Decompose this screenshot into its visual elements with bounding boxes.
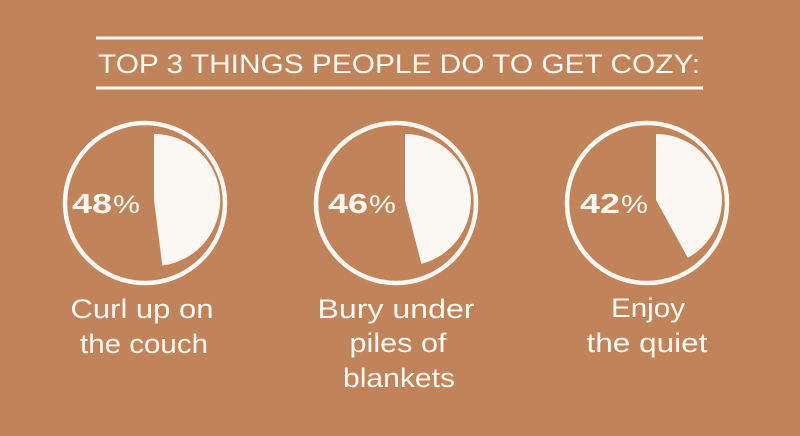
- panel: 42% enjoy the quiet: 42: [580, 188, 620, 219]
- title: TOP 3 THINGS PEOPLE DO TO GET COZY:: [98, 49, 700, 79]
- panel: 48% curl up: [65, 123, 225, 359]
- panel: 48% curl up: the couch: [80, 329, 208, 359]
- panel: 42% enjoy the quiet: [567, 123, 727, 358]
- panel: 48% curl up: %: [113, 191, 140, 219]
- panel: 42% enjoy the quiet: Enjoy: [611, 293, 686, 323]
- panel: 46% bury under blankets: Bury under: [318, 294, 475, 324]
- panel: 46% bury under blankets: blankets: [343, 363, 455, 393]
- panel: 46% bury under blankets: piles of: [350, 328, 447, 358]
- panel: 46% bury under blankets: %: [369, 191, 396, 219]
- panel: 48% curl up: Curl up on: [70, 294, 214, 324]
- panel: 48% curl up: 48: [72, 188, 112, 219]
- panel: 42% enjoy the quiet: the quiet: [586, 328, 708, 358]
- panel: 46% bury under blankets: [316, 123, 476, 393]
- panel: 42% enjoy the quiet: %: [621, 191, 648, 219]
- panel: 46% bury under blankets: 46: [328, 188, 368, 219]
